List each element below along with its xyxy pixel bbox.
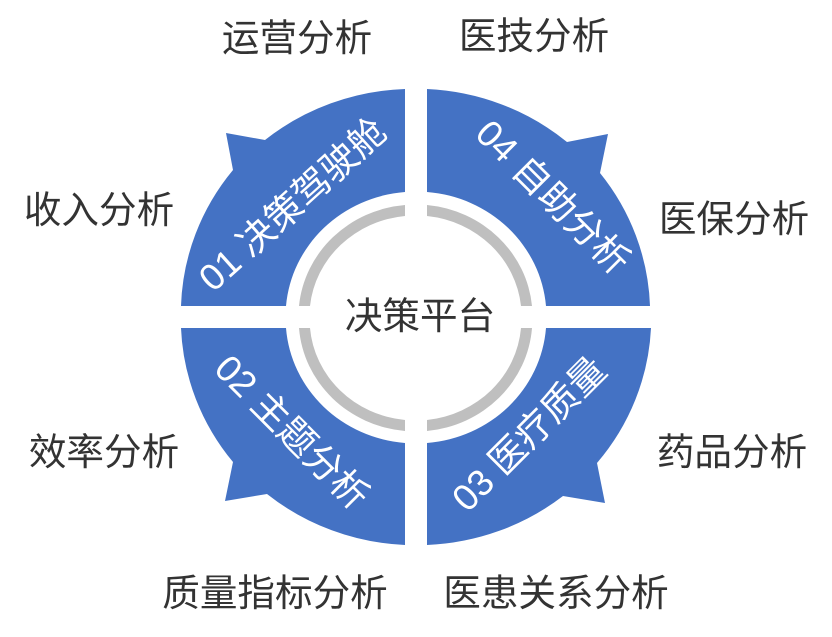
label: 运营分析: 运营分析 — [222, 17, 372, 59]
label: 医保分析: 医保分析 — [659, 198, 809, 240]
gray ring: bottom right — [427, 328, 532, 431]
center title: 决策平台 — [345, 295, 495, 337]
gray ring: top right — [427, 205, 532, 306]
panel: segment 01 决策驾驶舱: 01 决策驾驶舱 — [191, 110, 394, 299]
panel: segment 02 主题分析: 02 主题分析 — [207, 347, 377, 517]
label: 医技分析: 医技分析 — [459, 15, 609, 57]
panel: segment 03 医疗质量 — [427, 328, 651, 545]
panel: segment 04 自助分析 — [427, 89, 650, 306]
label: 收入分析: 收入分析 — [24, 189, 174, 231]
panel: segment 04 自助分析: 04 自助分析 — [468, 112, 638, 282]
gray ring: bottom left — [299, 328, 405, 431]
label: 效率分析: 效率分析 — [29, 431, 179, 473]
label: 医患关系分析: 医患关系分析 — [443, 572, 669, 614]
label: 药品分析: 药品分析 — [657, 431, 807, 473]
gray ring: top left — [299, 205, 405, 306]
panel: segment 02 主题分析 — [181, 328, 405, 545]
label: 质量指标分析: 质量指标分析 — [162, 572, 388, 614]
panel: segment 03 医疗质量: 03 医疗质量 — [444, 349, 614, 519]
